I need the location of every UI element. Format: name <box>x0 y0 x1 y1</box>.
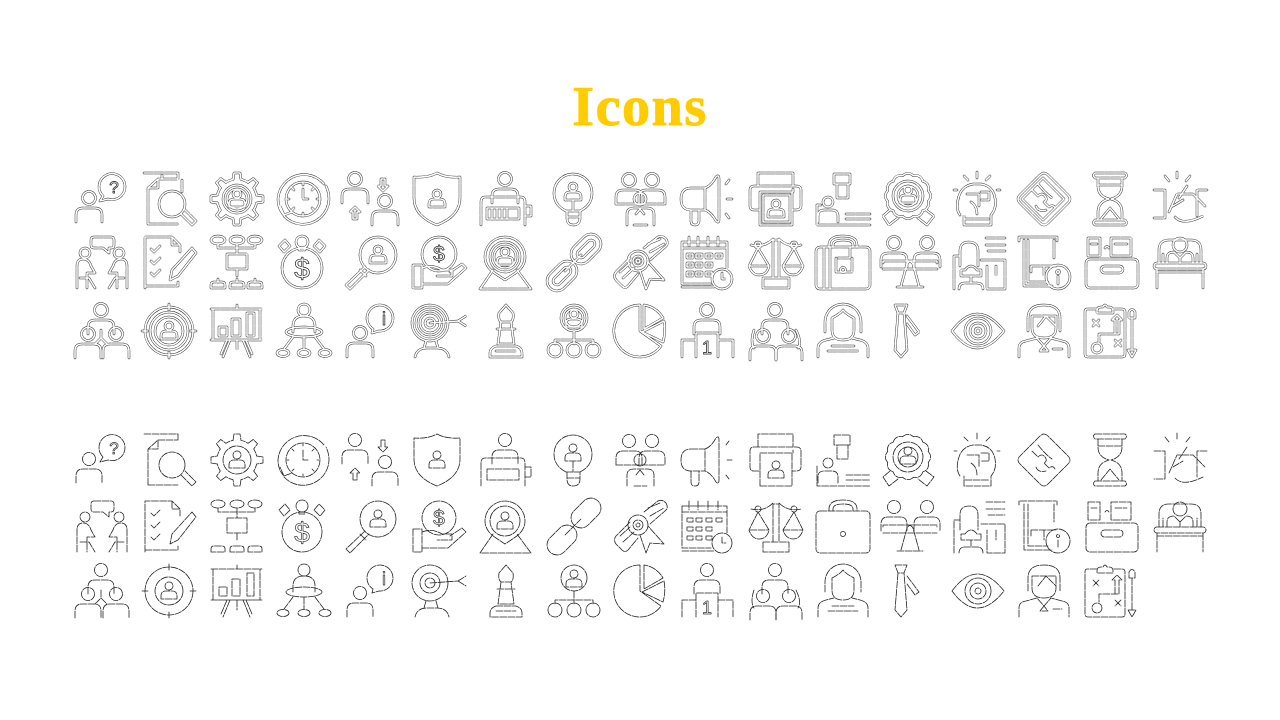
icon: boss at desk <box>1154 502 1206 552</box>
icon: checklist pencil <box>145 501 196 552</box>
icon: checklist pencil <box>145 237 196 288</box>
icon: eye <box>952 314 1004 348</box>
title: Icons <box>572 76 708 138</box>
panel: thin line icon set <box>75 433 1207 620</box>
icon: person info <box>347 565 393 617</box>
icon: briefcase <box>816 500 870 553</box>
icon: clock cycle <box>278 436 329 485</box>
icon: strategy board <box>1085 565 1136 617</box>
icon: dollar clock <box>279 500 325 552</box>
icon: woman <box>818 304 868 357</box>
icon: balance people <box>881 500 940 551</box>
icon: megaphone <box>681 437 732 486</box>
icon: podium <box>682 564 733 618</box>
icon: handshake <box>1154 433 1207 482</box>
icon: hierarchy <box>75 304 129 358</box>
icon: desk items <box>1086 502 1138 552</box>
icon: document search <box>144 434 196 486</box>
icon: chain link <box>543 494 605 559</box>
icon: document search <box>144 173 196 225</box>
icon: podium <box>682 304 733 358</box>
icon: briefcase <box>816 236 870 289</box>
icon: megaphone <box>681 176 732 225</box>
icon: gear person <box>211 173 263 225</box>
icon: puzzle diamond <box>1018 173 1070 225</box>
icon: team <box>616 434 665 486</box>
icon: person network <box>277 564 331 616</box>
icon: hand coin <box>413 501 466 552</box>
icon: presentation board <box>211 305 262 357</box>
icon: chess piece <box>490 305 522 357</box>
icon: person network <box>277 304 331 356</box>
icon: handshake <box>1154 172 1207 221</box>
icon: scales <box>749 503 803 552</box>
icon: award badge <box>883 173 934 225</box>
icon: printer portrait <box>750 434 801 486</box>
icon: desk lamp person <box>817 435 870 486</box>
icon: person at device <box>481 434 531 486</box>
icon: clock cycle <box>278 175 329 224</box>
icon: agent <box>1019 305 1069 357</box>
icon: org tree <box>548 565 600 617</box>
icon: team <box>616 174 665 225</box>
icon: hierarchy <box>75 564 129 618</box>
icon: puzzle diamond <box>1018 434 1070 486</box>
icon: hourglass <box>1094 434 1126 486</box>
icon: chess piece <box>490 565 522 617</box>
icon: gear person <box>211 434 263 486</box>
icon: printer portrait <box>750 173 801 225</box>
icon: pie chart <box>614 565 665 617</box>
icon: necktie <box>895 305 919 357</box>
icon: award badge <box>883 434 934 486</box>
icon: strategy board <box>1085 305 1136 357</box>
icon: idea fist <box>954 172 1000 225</box>
icon: org tree <box>548 305 600 357</box>
icon: dartboard <box>412 565 466 617</box>
icon: desk lamp person <box>817 174 870 225</box>
icon: idea fist <box>954 433 1000 486</box>
icon: cabinet info <box>1019 501 1070 553</box>
icon: diploma <box>614 236 667 289</box>
panel: outlined icon set <box>75 172 1207 360</box>
icon: hand coin <box>413 237 466 288</box>
icon: meeting <box>750 304 802 360</box>
icon: woman <box>818 564 868 617</box>
icon: org flow <box>211 500 262 552</box>
icon: office furniture <box>954 238 1005 289</box>
icon: people swap <box>342 172 398 225</box>
icon: pie chart <box>614 305 665 357</box>
icon: cabinet info <box>1019 237 1070 289</box>
icon: people swap <box>342 434 398 486</box>
icon: hourglass <box>1094 173 1126 225</box>
icon: person question <box>76 174 125 222</box>
icon: presentation board <box>211 565 262 617</box>
icon: magnifier person <box>346 237 396 289</box>
icon: org flow <box>211 236 262 288</box>
icon: meeting <box>750 564 802 620</box>
icon: office furniture <box>954 502 1005 553</box>
icon: lightbulb person <box>554 435 592 486</box>
icon: person at device <box>481 172 531 225</box>
icon: dartboard <box>412 305 466 357</box>
icon: target person <box>142 564 196 618</box>
icon: two people talking <box>77 237 127 288</box>
icon: necktie <box>895 565 919 617</box>
icon: person shield <box>414 434 460 486</box>
icon: eye <box>952 574 1004 608</box>
icon: person info <box>347 305 393 357</box>
icon: lightbulb person <box>554 174 592 225</box>
icon: map pin person <box>480 237 531 289</box>
icon: magnifier person <box>346 501 396 553</box>
icon: chain link <box>543 230 605 295</box>
icon: calendar clock <box>682 501 732 553</box>
icon: two people talking <box>77 501 127 552</box>
icon: desk items <box>1086 238 1138 288</box>
icon: agent <box>1019 565 1069 617</box>
icon: scales <box>749 239 803 288</box>
icon: dollar clock <box>279 236 325 288</box>
icon: person shield <box>414 173 460 225</box>
icon: map pin person <box>480 501 531 553</box>
icon: diploma <box>614 500 667 553</box>
icon: boss at desk <box>1154 238 1206 288</box>
icon: person question <box>76 435 125 483</box>
icon: calendar clock <box>682 237 732 289</box>
icon: balance people <box>881 236 940 287</box>
icon: target person <box>142 304 196 358</box>
